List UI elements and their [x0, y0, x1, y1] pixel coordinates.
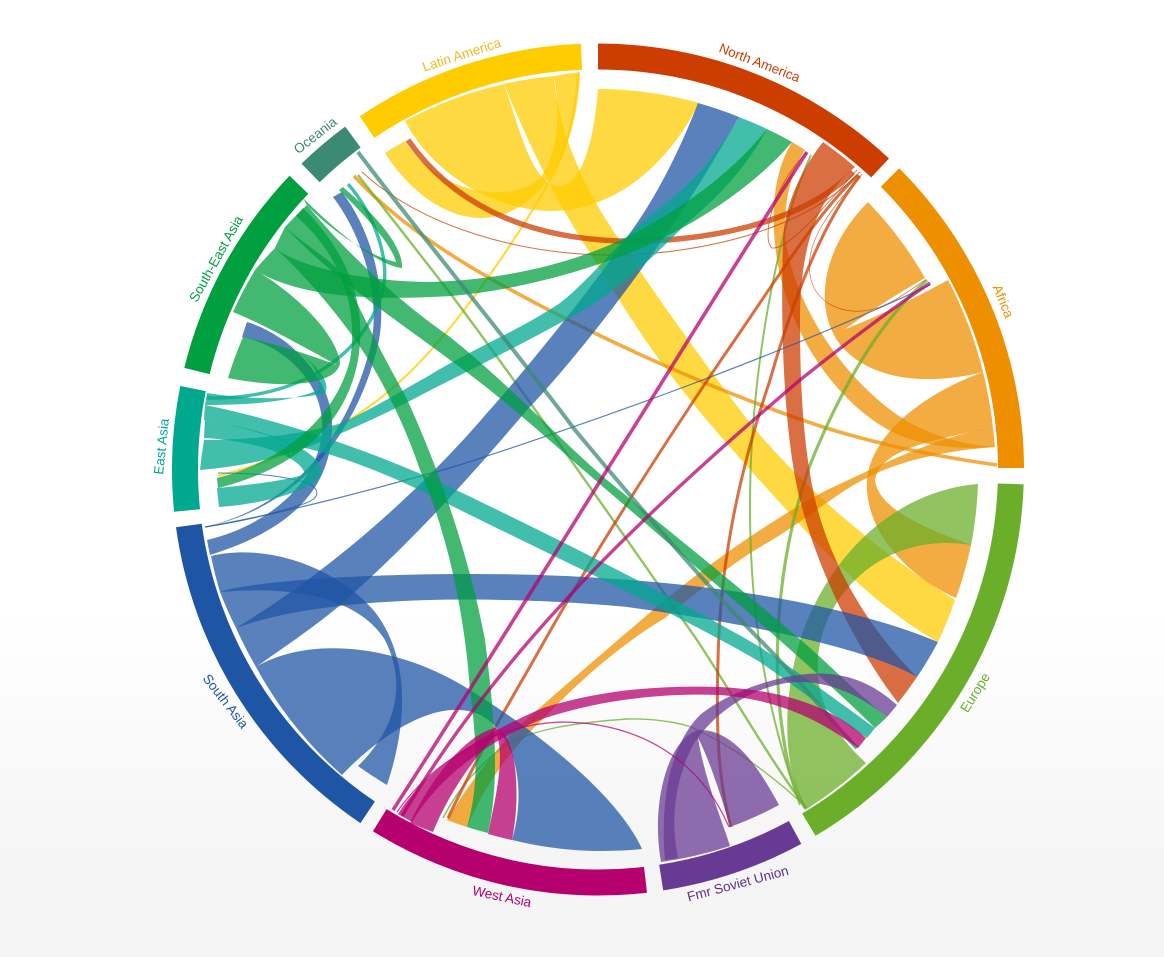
- chord: East Asia to North America: [200, 117, 767, 470]
- chord: South Asia to Oceania: [205, 192, 381, 527]
- chord: Latin America to North America: [405, 84, 699, 211]
- chord: South Asia to East Asia: [205, 473, 317, 527]
- label: Latin America: Latin America: [420, 35, 503, 74]
- outer ring segments: [172, 44, 1024, 896]
- chord: North America to Oceania: [362, 172, 860, 255]
- chord: Latin America to Europe: [504, 76, 955, 642]
- chord: North America to itself: [768, 153, 857, 248]
- chord: North America to Latin America: [408, 140, 853, 241]
- chord: North America to Africa: [809, 174, 925, 311]
- chord: West Asia to Africa: [402, 283, 930, 816]
- chord: East Asia to South-East Asia: [205, 321, 326, 405]
- chord: Fmr Soviet Union to Europe: [664, 673, 897, 860]
- label: Africa: Africa: [990, 283, 1017, 321]
- chord: South-East Asia to North America: [255, 129, 792, 298]
- chord: South Asia to North America: [236, 103, 739, 667]
- chord: Europe to North America: [750, 155, 811, 805]
- chord: South-East Asia to itself: [228, 270, 340, 384]
- label: South Asia: South Asia: [200, 671, 252, 732]
- region labels: [151, 35, 1017, 910]
- chord: South Asia to Africa: [205, 285, 930, 527]
- chord: Africa to North America: [774, 142, 995, 448]
- chord: North America to Fmr Soviet Union: [717, 176, 860, 827]
- chord: East Asia to Europe: [204, 405, 875, 738]
- label: North America: North America: [717, 40, 803, 85]
- chord: Europe to West Asia: [443, 719, 807, 818]
- chord: Latin America to itself: [385, 72, 580, 218]
- chord: West Asia to Europe: [398, 687, 866, 822]
- label: Fmr Soviet Union: Fmr Soviet Union: [686, 863, 790, 904]
- label: Europe: Europe: [957, 670, 993, 715]
- chord: East Asia to itself: [204, 420, 321, 507]
- chord: South-East Asia to Europe: [285, 205, 887, 728]
- chord: West Asia to Fmr Soviet Union: [397, 722, 729, 827]
- label: East Asia: East Asia: [151, 417, 172, 475]
- chord: South-East Asia to East Asia: [217, 208, 360, 488]
- ring: Europe: [802, 484, 1024, 836]
- chord: Europe to Africa: [777, 280, 927, 808]
- chord: West Asia to itself: [410, 728, 517, 840]
- ring: East Asia: [172, 386, 206, 512]
- ring: West Asia: [373, 809, 647, 896]
- chord: North America to Europe: [782, 142, 917, 703]
- chords: [200, 72, 997, 862]
- label: West Asia: West Asia: [471, 883, 533, 910]
- chord: Europe to Oceania: [358, 175, 806, 808]
- chord: South Asia to South-East Asia: [207, 322, 332, 555]
- ring: South Asia: [176, 524, 375, 823]
- chord: Africa to Europe: [867, 372, 993, 598]
- chord: South-East Asia to West Asia: [275, 227, 495, 833]
- chord: Latin America to East Asia: [218, 74, 578, 476]
- ring: Oceania: [302, 127, 361, 182]
- chord: Africa to itself: [825, 202, 983, 379]
- label: Oceania: Oceania: [291, 114, 340, 157]
- chord: South Asia to West Asia: [256, 648, 642, 851]
- chord: Oceania to Europe: [358, 152, 857, 748]
- chord: Africa to West Asia: [447, 428, 995, 827]
- label: South-East Asia: South-East Asia: [186, 213, 246, 304]
- chord: Fmr Soviet Union to itself: [658, 730, 779, 862]
- ring: North America: [598, 44, 889, 177]
- chord: North America to West Asia: [448, 175, 858, 818]
- chord: West Asia to North America: [393, 152, 807, 810]
- chord: Europe to itself and Africa lobe: [787, 484, 978, 810]
- ring: Latin America: [360, 44, 582, 138]
- chord: South Asia to itself: [211, 552, 402, 785]
- chord: East Asia to Oceania: [207, 184, 385, 398]
- ring: Fmr Soviet Union: [659, 821, 801, 890]
- ring: South-East Asia: [184, 176, 308, 374]
- chord: South Asia to Europe: [220, 574, 938, 677]
- chord: Africa to Oceania: [354, 176, 997, 465]
- chord: South-East Asia to Oceania: [303, 187, 402, 268]
- ring: Africa: [881, 168, 1024, 468]
